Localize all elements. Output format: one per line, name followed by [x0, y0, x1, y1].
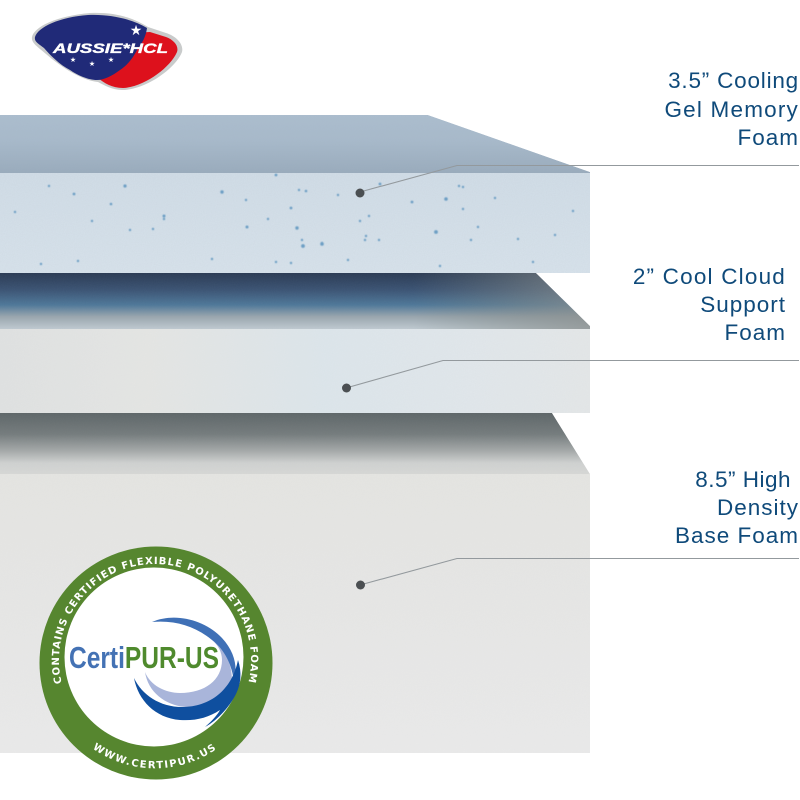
callout: cool cloud support foam: [342, 360, 799, 392]
label: cool cloud support foam: 2” Cool Cloud: [633, 264, 786, 289]
label: high density base foam: [675, 467, 799, 548]
label: high density base foam: 8.5” High: [695, 467, 791, 492]
label: cool cloud support foam: Support: [700, 292, 786, 317]
badge ring text: CONTAINS CERTIFIED FLEXIBLE POLYURETHANE FOAM: [52, 556, 258, 684]
label: cooling gel memory foam: [664, 68, 799, 150]
logo: Aussie HCL: [32, 13, 182, 90]
callout: cooling gel memory foam: [356, 166, 799, 198]
logo stars: ★: [130, 23, 142, 39]
callout: high density base foam: [356, 558, 799, 590]
gel speckles: [14, 174, 574, 267]
foam layer: base: [0, 413, 590, 753]
logo stars: [70, 23, 142, 68]
badge url text: WWW.CERTIPUR.US: [94, 742, 215, 768]
badge: CertiPUR-US: [40, 546, 272, 780]
logo stars: ★: [89, 60, 95, 68]
badge swoosh: [134, 618, 240, 727]
foam layer: cooling gel memory: [0, 115, 590, 273]
label: high density base foam: Base Foam: [675, 523, 799, 548]
label: cooling gel memory foam: 3.5” Cooling: [668, 68, 799, 93]
logo wordmark: AUSSIE*HCL: [52, 40, 168, 56]
badge wordmark: CertiPUR-US: [69, 640, 219, 675]
label: cool cloud support foam: [633, 264, 786, 345]
foam layer: cool cloud support: [0, 273, 590, 413]
label: cool cloud support foam: Foam: [724, 320, 786, 345]
label: cooling gel memory foam: Foam: [737, 125, 799, 150]
logo stars: ★: [108, 56, 114, 64]
label: high density base foam: Density: [717, 495, 799, 520]
label: cooling gel memory foam: Gel Memory: [664, 97, 799, 122]
logo stars: ★: [70, 56, 76, 64]
